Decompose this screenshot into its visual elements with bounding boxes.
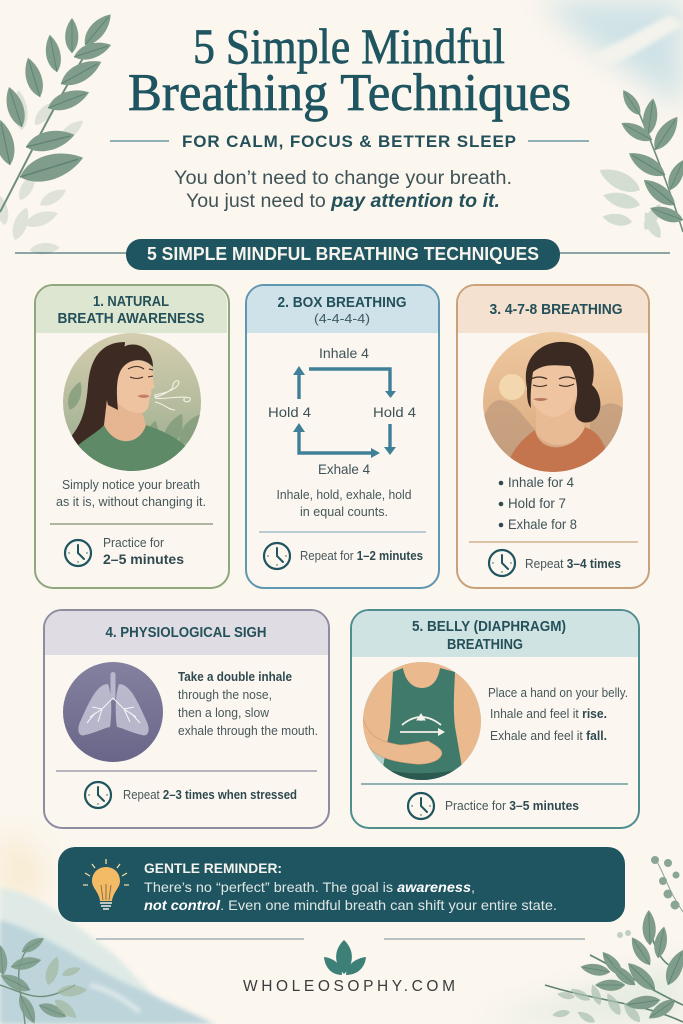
heading: card 3: 3. 4-7-8 BREATHING (490, 302, 622, 318)
text: card 4 description: Take a double inhale (178, 670, 292, 684)
decorative leaves: top right (596, 87, 683, 241)
heading: card 4: 4. PHYSIOLOGICAL SIGH (106, 625, 266, 641)
text: card 5 duration: Practice for 3–5 minutes (445, 799, 579, 813)
list: 4-7-8 steps: Inhale for 4 (508, 474, 574, 490)
text: card 5 description: Exhale and feel it fall. (490, 729, 607, 743)
title: Breathing Techniques (128, 64, 571, 122)
icon: clock (408, 793, 434, 819)
intro text: You don’t need to change your breath. (174, 168, 512, 189)
heading: card 2: 2. BOX BREATHING (278, 295, 406, 311)
illustration: woman with eyes closed (480, 330, 626, 476)
icon: clock (65, 540, 91, 566)
illustration: hand on belly (363, 662, 481, 780)
text: card 1 description (56, 477, 206, 509)
list: 4-7-8 steps (499, 474, 577, 532)
box breathing diagram: Hold 4 (268, 404, 311, 420)
title: 5 Simple Mindful (193, 18, 505, 74)
heading: card 2 (278, 295, 406, 326)
text: reminder: not control. Even one mindful breath can shift your entire state. (144, 897, 557, 913)
icon: clock (489, 550, 515, 576)
text: card 4 description: through the nose, (178, 688, 272, 702)
arrow: inhale (309, 369, 396, 398)
text: card 2 description (276, 488, 412, 519)
arrow: exhale (299, 432, 380, 458)
decorative leaves: bottom left (0, 934, 87, 1024)
text: card 2 description: in equal counts. (300, 505, 388, 519)
text: card 1 description: Simply notice your breath (62, 477, 200, 492)
heading: card 1: 1. NATURAL (93, 294, 169, 310)
text: reminder: There’s no “perfect” breath. The goal is awareness, (144, 879, 475, 895)
box breathing diagram: Inhale 4 (319, 345, 369, 361)
arrow: hold left (293, 366, 305, 432)
list: 4-7-8 steps: Exhale for 8 (508, 516, 577, 532)
intro text: You just need to pay attention to it. (186, 191, 500, 212)
heading: card 5: BREATHING (447, 637, 523, 653)
text: card 1 description: as it is, without changing it. (56, 494, 206, 509)
panel: 3 4-7-8 breathing (457, 285, 649, 588)
box breathing diagram (268, 345, 416, 477)
list: 4-7-8 steps: Hold for 7 (508, 495, 566, 511)
icon: clock (85, 782, 111, 808)
heading: card 1: BREATH AWARENESS (58, 311, 205, 327)
intro text (174, 168, 512, 212)
icon: light bulb (83, 859, 129, 909)
text: card 4 description: then a long, slow (178, 706, 270, 720)
panel: 1 natural breath awareness (35, 285, 229, 588)
text: card 2 duration: Repeat for 1–2 minutes (300, 549, 423, 563)
icon: clock (264, 543, 290, 569)
heading: card 5: 5. BELLY (DIAPHRAGM) (412, 619, 566, 635)
text: card 1 duration: Practice for (103, 535, 165, 550)
icon: three leaves (324, 940, 366, 975)
text: card 3 duration: Repeat 3–4 times (525, 557, 621, 571)
section banner: 5 SIMPLE MINDFUL BREATHING TECHNIQUES (147, 244, 539, 264)
panel: 4 physiological sigh (44, 610, 329, 828)
heading: card 5 (412, 619, 566, 653)
panel: 5 belly breathing (351, 610, 639, 828)
title (128, 18, 571, 122)
heading: card 2: (4-4-4-4) (314, 311, 370, 326)
text: card 2 description: Inhale, hold, exhale, hold (276, 488, 412, 502)
box breathing diagram: Hold 4 (373, 404, 416, 420)
text: card 5 description: Place a hand on your belly. (488, 686, 628, 700)
heading: card 1 (58, 294, 205, 327)
text: card 1 duration (103, 535, 184, 567)
text: card 4 description: exhale through the mouth. (178, 724, 318, 738)
logo (243, 940, 455, 995)
arrow: hold right (384, 424, 396, 455)
text: card 1 duration: 2–5 minutes (103, 551, 184, 567)
panel: 2 box breathing (246, 285, 439, 588)
subtitle: FOR CALM, FOCUS & BETTER SLEEP (182, 132, 516, 151)
decorative leaves: top left (0, 9, 116, 255)
box breathing diagram: Exhale 4 (318, 461, 370, 477)
callout: gentle reminder (58, 847, 625, 922)
text: reminder (144, 860, 557, 913)
text: card 5 description (488, 686, 628, 743)
text: card 4 duration: Repeat 2–3 times when stressed (123, 788, 297, 802)
text: card 4 description (178, 670, 318, 738)
brand name: WHOLEOSOPHY.COM (243, 978, 455, 995)
icon: lungs (63, 662, 163, 762)
text: reminder: GENTLE REMINDER: (144, 860, 282, 876)
illustration: woman breathing out (63, 333, 201, 471)
decorative leaves: bottom right (545, 856, 683, 1024)
section banner (15, 239, 670, 270)
text: card 5 description: Inhale and feel it rise. (490, 707, 607, 721)
